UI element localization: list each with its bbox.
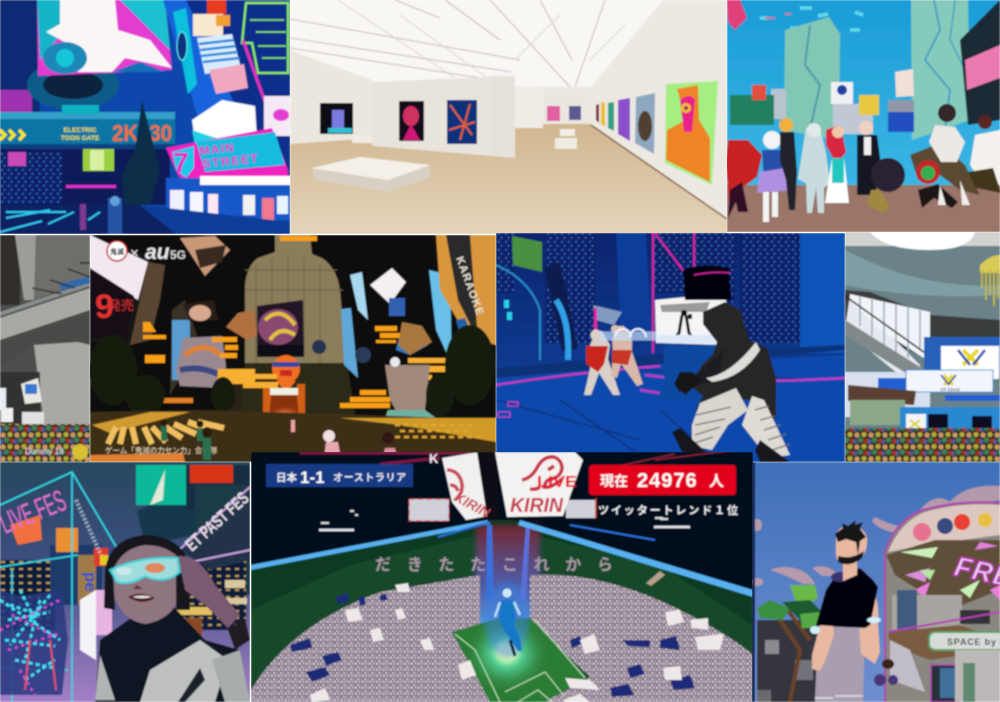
- ground: [727, 185, 1000, 232]
- goggles avatar: [95, 535, 250, 702]
- mouth: [128, 594, 155, 602]
- torii gate: [263, 384, 305, 439]
- neck and head: [843, 560, 857, 581]
- viewer count: 現在: [600, 473, 628, 489]
- light lower window: [845, 372, 930, 417]
- round building: [240, 235, 358, 430]
- street buildings: [0, 465, 250, 660]
- LIVE FES wireframe cube: [0, 472, 118, 702]
- white-pink dress avatar: [825, 126, 849, 203]
- crowd: [251, 574, 753, 702]
- light rails: [251, 511, 753, 597]
- booth sign front: [906, 370, 993, 392]
- dark upper wall: [845, 290, 1000, 380]
- anime strip: [888, 504, 1000, 552]
- flags and banners: [290, 593, 695, 697]
- KIRIN hanging banners: [429, 451, 583, 522]
- floodlights: [409, 498, 596, 521]
- floor: [496, 355, 845, 462]
- chandelier: [980, 255, 1000, 306]
- green field: [251, 520, 753, 702]
- soccer pitch: [452, 618, 587, 702]
- hand: [178, 556, 240, 628]
- goggles: [110, 558, 180, 583]
- panel: virtual lobby with crowd: Dummy 18: [25, 447, 64, 456]
- anime poster: [37, 0, 172, 76]
- red-coat avatar: [726, 140, 762, 218]
- main street sign: STREET: [202, 151, 260, 171]
- under-bridge buildings: [0, 149, 170, 205]
- orange pin marker: [272, 355, 300, 392]
- au 5G logo: 5G: [170, 248, 186, 262]
- background towers: [496, 233, 845, 353]
- au 5G logo: ×: [130, 245, 139, 262]
- panel: virtual art gallery: [290, 0, 727, 234]
- score bar: オーストラリア: [333, 472, 407, 484]
- main street sign: 7: [173, 147, 189, 178]
- left billboard: 9: [95, 288, 114, 326]
- trees: [89, 325, 495, 417]
- silver avatar: [798, 123, 830, 213]
- glowing golden clouds: [143, 236, 446, 408]
- panel: neon city street: [0, 0, 290, 234]
- street: [90, 410, 496, 462]
- street: ゲーム「鬼滅の力セン力」合同隊: [105, 445, 218, 455]
- right building with karaoke sign: [436, 235, 496, 355]
- legs: [815, 626, 865, 702]
- street past fes sign: ET PAST FES: [181, 488, 253, 555]
- billboards: [727, 0, 1000, 134]
- balcony: [0, 288, 90, 340]
- au 5G logo: au: [145, 241, 170, 264]
- score bar: 1-1: [300, 468, 325, 487]
- ceiling oval: [870, 232, 975, 250]
- left billboard: 発売: [108, 298, 134, 313]
- LIVE text: LIVE: [537, 474, 577, 491]
- glowing orb: [483, 634, 531, 674]
- bridge with sign: TOON GATE: [61, 135, 100, 142]
- benches: [312, 129, 577, 192]
- panel: anime collaboration in virtual Shibuya: [89, 235, 496, 462]
- screens: [21, 378, 42, 404]
- panel: virtual lobby with crowd: [0, 235, 91, 462]
- low-poly trees: [757, 585, 825, 702]
- feet: [672, 428, 706, 460]
- KIRIN hanging banners: KIRIN: [510, 495, 564, 517]
- large painting: orange figure: [665, 81, 718, 185]
- crowd: [845, 428, 1000, 462]
- left poster: [176, 336, 226, 388]
- hologram figure: [0, 590, 68, 695]
- avatars group: [726, 104, 1000, 222]
- crowd text: だきたたこれから: [375, 556, 613, 574]
- striped legs: [692, 388, 748, 450]
- main street sign: MAIN: [199, 140, 236, 158]
- left towers: [130, 262, 165, 345]
- black hat shape: [683, 265, 731, 300]
- neon triangles: [900, 547, 938, 558]
- booth sign front: XR Kinzai: [940, 387, 960, 392]
- standing avatar man: [810, 520, 881, 702]
- concrete column: [34, 342, 90, 425]
- right wall: [591, 0, 727, 220]
- left edge strip: [752, 462, 755, 702]
- right blue screens: [429, 270, 452, 365]
- crowd banner streak: [646, 571, 665, 586]
- clouds: [751, 486, 1000, 586]
- neon towers: [163, 0, 290, 180]
- panel: hero battle in blue virtual city: [496, 233, 845, 462]
- head: [112, 537, 180, 624]
- rear walls: [290, 50, 591, 158]
- main street sign: [166, 128, 288, 187]
- energy beam: [600, 329, 660, 337]
- black suit avatar: [779, 118, 797, 210]
- jacket: [95, 605, 250, 702]
- KIRIN hanging banners: KIRIN: [452, 489, 494, 521]
- street tree: [122, 100, 160, 205]
- wall spotlights: [32, 263, 90, 294]
- mech avatar: [867, 143, 980, 213]
- sign: [929, 632, 1000, 650]
- wristbands: [867, 617, 881, 623]
- black coat avatar: [857, 121, 881, 195]
- au 5G logo: 鬼滅: [110, 247, 124, 256]
- right poster and statue: [385, 322, 436, 418]
- booth sign back: [924, 337, 1000, 379]
- panel: avatar in decentralized world: [751, 462, 1000, 702]
- character cubes: [180, 236, 428, 363]
- confetti: [760, 8, 863, 30]
- viewer count: 人: [709, 473, 724, 490]
- bridge with sign: [0, 105, 175, 149]
- floor: [290, 124, 727, 234]
- pedestal: [656, 345, 746, 399]
- viewer count: 24976: [637, 470, 698, 492]
- top K: K: [429, 451, 439, 466]
- panel: avatars in virtual Shibuya: [726, 0, 1000, 232]
- street buildings: pe: [81, 572, 100, 592]
- tall tower building: [874, 502, 1000, 702]
- orange sign: 2K530: [112, 120, 172, 146]
- glowing player: [485, 582, 529, 658]
- towers: [771, 0, 970, 140]
- beams: [474, 525, 540, 640]
- lower facade: [890, 640, 925, 692]
- score bar: [266, 464, 413, 487]
- big monster figure: [672, 302, 790, 462]
- bright windows: [176, 607, 212, 615]
- pipes and wall: [496, 265, 622, 360]
- chevrons: [0, 130, 24, 140]
- shirt: [816, 568, 878, 628]
- schoolgirl avatar: [757, 131, 794, 222]
- small avatars: [160, 420, 398, 462]
- gate text: ELECTRIC: [64, 127, 97, 134]
- wall artworks: [320, 93, 655, 154]
- right building with karaoke sign: KARAOKE: [453, 255, 486, 318]
- central poster: [257, 300, 304, 357]
- panel: virtual expo hall: [845, 232, 1000, 462]
- ceiling grid: [290, 0, 625, 87]
- left arm: [812, 590, 834, 671]
- arm: [674, 372, 702, 392]
- booth sign back: XR Kinzai: [958, 370, 982, 376]
- crosswalk: [108, 422, 224, 444]
- dark building: [757, 620, 852, 702]
- left billboard: [90, 235, 148, 345]
- twitter trend: ツイッタートレンド１位: [598, 503, 738, 517]
- upper stripes: [300, 453, 470, 464]
- panel: neon live festival with goggles avatar: [0, 462, 253, 702]
- road: [0, 196, 290, 234]
- pink neon floor lines: [496, 366, 845, 398]
- booth panel: [848, 385, 1000, 435]
- white bodied avatars: [929, 104, 1000, 205]
- crowd: [0, 424, 90, 462]
- hero avatars: [584, 325, 643, 395]
- panel: soccer live stream stadium: [251, 450, 753, 702]
- shops: [166, 176, 290, 220]
- score bar: 日本: [276, 471, 297, 484]
- au 5G logo: [107, 241, 186, 264]
- interior: [892, 595, 962, 650]
- balcony: [845, 295, 920, 392]
- viewer count: [589, 465, 736, 495]
- right arm: [859, 586, 880, 664]
- street past fes sign: [180, 487, 253, 563]
- white video screen: [655, 293, 733, 345]
